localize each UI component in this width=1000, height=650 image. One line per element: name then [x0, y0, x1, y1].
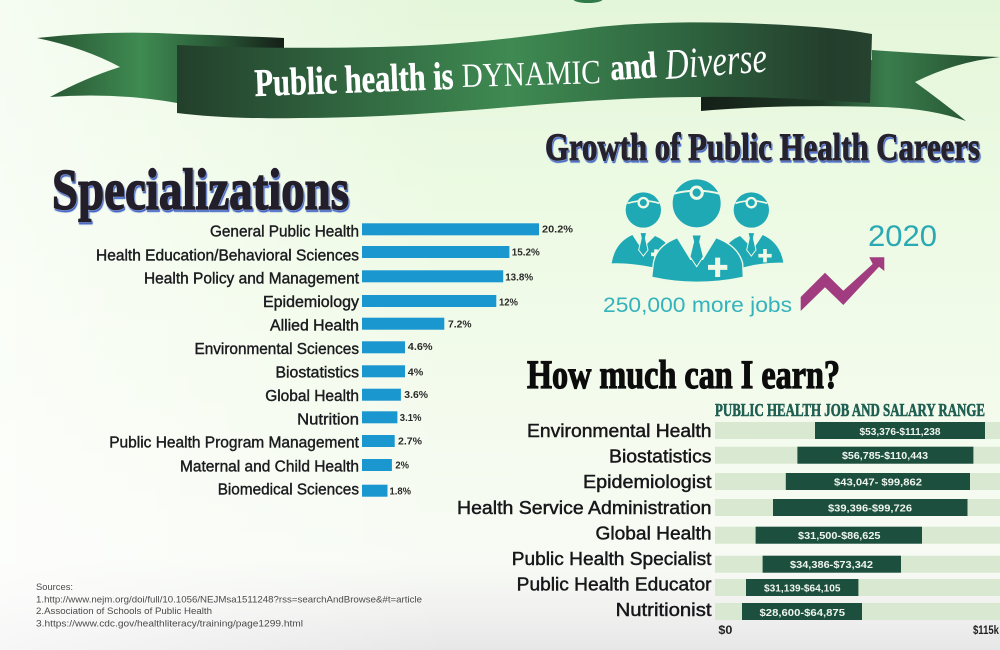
sources text block: 3.https://www.cdc.gov/healthliteracy/training/page1299.html: [36, 619, 303, 630]
row: Nutritionist: Nutritionist: [616, 600, 712, 620]
row: Nutritionist: [616, 600, 1000, 620]
row: Public Health Educator: $31,139-$64,105: [764, 582, 841, 594]
row: Epidemiologist: [583, 472, 1000, 492]
ribbon main band: [177, 22, 872, 118]
row: Public Health Specialist: $34,386-$73,342: [790, 559, 873, 571]
bar: Health Education/Behavioral Sciences: [96, 246, 540, 264]
bar: Health Education/Behavioral Sciences: Health Education/Behavioral Sciences: [96, 247, 359, 264]
row: Biostatistics: $56,785-$110,443: [842, 450, 928, 462]
bar: Health Policy and Management: [144, 270, 533, 288]
bar: Public Health Program Management: 2.7%: [398, 436, 422, 447]
bar: Health Policy and Management: Health Policy and Management: [144, 271, 360, 288]
heading: specializations: Specializations: [52, 157, 349, 222]
row: Epidemiologist: $43,047- $99,862: [834, 476, 922, 488]
icon: centre doctor: [652, 179, 743, 282]
row: Health Service Administration: $39,396-$99,726: [828, 502, 912, 514]
ribbon right tail: [701, 50, 1000, 121]
row: Public Health Specialist: Public Health Specialist: [512, 549, 712, 569]
sources text block: 2.Association of Schools of Public Health: [36, 606, 212, 617]
row: Health Service Administration: [457, 498, 1000, 518]
bar: Epidemiology: [263, 294, 518, 311]
bar: Maternal and Child Health: 2%: [395, 461, 409, 472]
ribbon left tail: [37, 33, 284, 103]
axis label: $0: $0: [718, 625, 732, 637]
row: Biostatistics: [609, 447, 1000, 467]
label: 250,000 more jobs: 250,000 more jobs: [603, 294, 792, 317]
bar: Allied Health: [270, 317, 472, 334]
bar: Biomedical Sciences: Biomedical Sciences: [218, 482, 359, 499]
row: Environmental Health: Environmental Health: [527, 421, 712, 441]
row: Public Health Educator: [517, 575, 1000, 596]
bar: Nutrition: Nutrition: [297, 411, 359, 428]
bar: Nutrition: 3.1%: [400, 413, 422, 424]
banner title: Public health is: [254, 55, 454, 105]
sources text block: Sources:: [36, 582, 73, 593]
bar: Health Policy and Management: 13.8%: [505, 273, 533, 284]
top edge green fragment: [573, 0, 603, 3]
banner title: DYNAMIC: [461, 54, 601, 95]
bar: Public Health Program Management: Public Health Program Management: [109, 435, 360, 452]
bar: Biostatistics: 4%: [408, 367, 423, 378]
row: Nutritionist: $28,600-$64,875: [760, 607, 845, 619]
bar: Allied Health: Allied Health: [270, 317, 359, 334]
bar: Biostatistics: [276, 364, 423, 381]
row: Biostatistics: Biostatistics: [609, 447, 712, 467]
row: Epidemiologist: Epidemiologist: [583, 472, 712, 492]
banner title: Diverse: [662, 34, 768, 89]
banner title: [254, 34, 768, 105]
bar: Environmental Sciences: [194, 341, 433, 358]
bar: Epidemiology: 12%: [499, 297, 518, 308]
banner title: and: [609, 45, 658, 89]
bar: General Public Health: [210, 223, 573, 241]
bar: General Public Health: 20.2%: [542, 225, 573, 236]
salary range chart: [457, 421, 1000, 637]
sources text block: 1.http://www.nejm.org/doi/full/10.1056/NEJMsa1511248?rss=searchAndBrowse&#t=article: [36, 594, 422, 605]
row: Global Health: Global Health: [596, 523, 712, 543]
bar: Epidemiology: Epidemiology: [263, 294, 359, 311]
bar: Biomedical Sciences: 1.8%: [390, 486, 411, 497]
bar: Allied Health: 7.2%: [448, 319, 472, 330]
bar: Global Health: 3.6%: [404, 390, 428, 401]
bar: General Public Health: General Public Health: [210, 224, 359, 241]
bar: Health Education/Behavioral Sciences: 15.2%: [512, 248, 540, 259]
row: Public Health Educator: Public Health Educator: [517, 575, 712, 595]
bar: Global Health: [265, 388, 428, 405]
bar: Biostatistics: Biostatistics: [276, 364, 359, 381]
bar: Environmental Sciences: Environmental Sciences: [194, 341, 359, 358]
bar: Global Health: Global Health: [265, 388, 359, 405]
arrow: rising trend: [801, 257, 884, 311]
row: Environmental Health: [527, 421, 1000, 441]
row: Global Health: $31,500-$86,625: [798, 530, 881, 542]
banner ribbon: [37, 22, 1000, 121]
icon: right doctor: [723, 192, 783, 267]
bar: Environmental Sciences: 4.6%: [408, 342, 433, 353]
row: Environmental Health: $53,376-$111,238: [860, 426, 941, 438]
row: Public Health Specialist: [512, 549, 1000, 573]
row: Health Service Administration: Health Service Administration: [457, 498, 712, 518]
bar chart: specializations: [96, 223, 573, 499]
row: Global Health: [596, 523, 1000, 544]
bar: Maternal and Child Health: Maternal and Child Health: [180, 458, 359, 475]
label: 2020: 2020: [868, 220, 937, 253]
bar: Nutrition: [297, 411, 422, 428]
icon: left doctor: [612, 192, 672, 267]
sources text block: [36, 582, 422, 630]
heading: how much can I earn: How much can I earn?: [527, 352, 840, 397]
icon: three doctors: [612, 179, 783, 282]
